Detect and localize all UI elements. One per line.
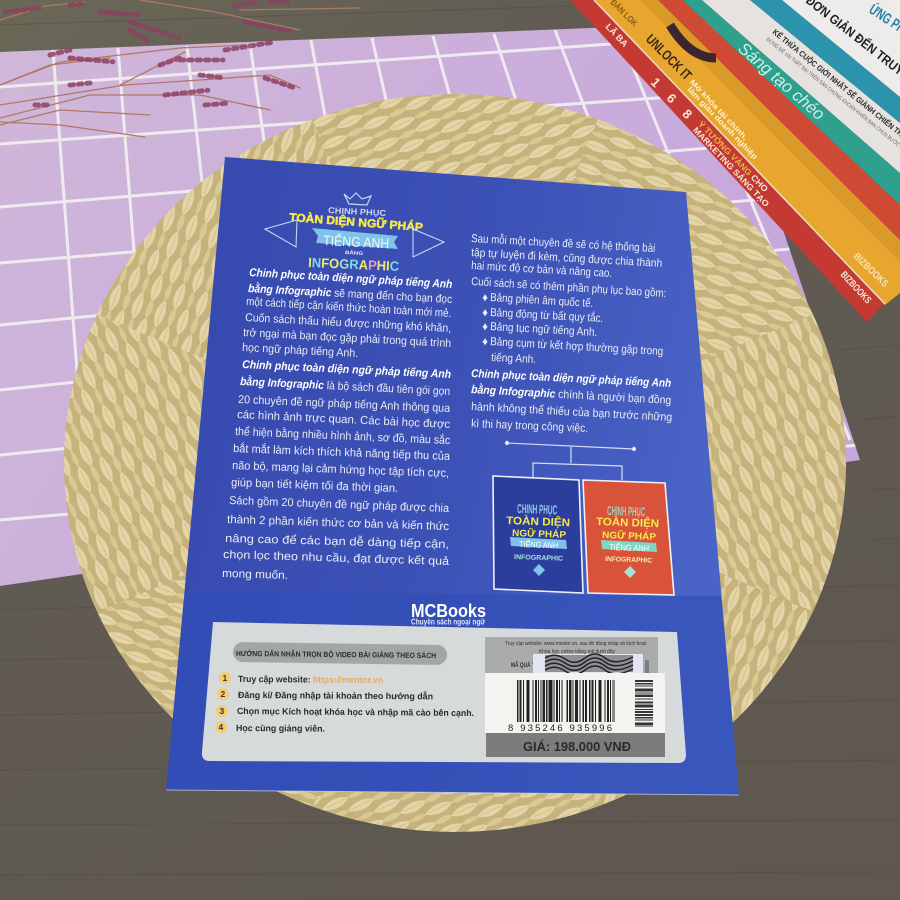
left text column: thành 2 phần kiến thức cơ bản và kiến thức — [227, 514, 450, 533]
left text column: mong muốn. — [222, 568, 288, 582]
right text column: tiếng Anh. — [491, 352, 536, 366]
tree connector diagram — [505, 441, 636, 480]
title: bang: BẰNG — [345, 248, 363, 257]
book thumbnail: blue: TOÀN DIỆN — [506, 514, 570, 529]
book thumbnail: red: CHINH PHỤC — [607, 503, 646, 519]
barcode area — [485, 673, 665, 734]
right text column: kì thi hay trong công việc. — [471, 418, 588, 435]
step 3: 3 — [220, 706, 224, 716]
right text column: ♦ — [482, 292, 488, 304]
left text column: thể hiện bằng nhiều hình ảnh, sơ đồ, màu sắc — [235, 425, 451, 447]
book thumbnail: red: INFOGRAPHIC — [605, 556, 652, 565]
left text column: một cách tiếp cận kiến thức hoàn toàn mới mẻ. — [246, 296, 452, 320]
right text column: Bảng động từ bất quy tắc. — [490, 306, 604, 325]
activation code box: Khóa học online bằng mã dưới đây — [539, 648, 615, 655]
grey information panel — [202, 622, 686, 763]
spine: orange book text: UNLOCK IT — [643, 31, 695, 83]
spine: red book text: 1 6 8 — [648, 75, 695, 122]
stack of books at top right — [570, 0, 900, 322]
scratch-off pattern — [545, 654, 633, 674]
left text column: các hình ảnh trực quan. Các bài học được — [237, 409, 451, 431]
left text column: não bộ, mang lại cảm hứng học tập tích cực, — [232, 460, 449, 480]
title: infographic: INFOGRAPHIC — [308, 255, 400, 274]
right text column: ♦ — [482, 307, 488, 319]
video guide heading pill — [233, 642, 447, 665]
left text column: học ngữ pháp tiếng Anh. — [242, 342, 359, 360]
left text column: Cuốn sách thấu hiểu được những khó khăn, — [245, 312, 451, 335]
left text column: chọn lọc theo nhu cầu, đạt được kết quả — [223, 549, 450, 568]
activation code box: Truy cập website: www.mentor.vn, sau đó đăng nhập và kích hoạt — [505, 641, 646, 647]
left text column: giúp bạn tiết kiệm tối đa thời gian. — [231, 477, 398, 495]
right text column: hành không thể thiếu của bạn trước những — [471, 401, 672, 424]
spine: red book text: BIZBOOKS — [838, 270, 873, 306]
left text column — [222, 267, 453, 582]
right text column: ♦ — [482, 321, 488, 333]
spine: red book text — [604, 22, 873, 306]
right text column: Sau mỗi một chuyên đề sẽ có hệ thống bài — [471, 232, 656, 255]
step 4: 4 — [218, 722, 224, 732]
right text column: Cuối sách sẽ có thêm phần phụ lục bao gồm: — [471, 276, 667, 300]
spine: red book text: MARKETING SÁNG TẠO — [691, 125, 772, 209]
step 2: 2 — [220, 689, 226, 699]
publisher logo: MCBooks: MCBooks — [411, 601, 486, 621]
dried pink flowers — [0, 0, 360, 137]
book back cover — [166, 157, 739, 795]
icon: left triangle — [265, 220, 297, 247]
book thumbnail: blue: INFOGRAPHIC — [514, 554, 563, 563]
book thumbnail: red: TOÀN DIỆN — [596, 515, 659, 530]
right text column: Bảng cụm từ kết hợp thường gặp trong — [490, 336, 664, 358]
step 1: Truy cập website: https://mentor.vn — [238, 674, 383, 685]
book thumbnail: blue: CHINH PHỤC — [517, 501, 558, 517]
left text column: Chinh phục toàn diện ngữ pháp tiếng Anh — [249, 267, 453, 291]
right text column: hai mức độ cơ bản và nâng cao. — [471, 260, 612, 280]
left text column: 20 chuyên đề ngữ pháp tiếng Anh thông qua — [238, 394, 451, 415]
left text column: bắt mắt làm kích thích khả năng tiếp thu của — [233, 442, 451, 463]
price bar: GIÁ: 198.000 VNĐ — [523, 739, 631, 754]
spine: orange book text — [609, 0, 890, 290]
left text column: Chinh phục toàn diện ngữ pháp tiếng Anh — [242, 359, 451, 381]
title: toan dien ngu phap: TOÀN DIỆN NGỮ PHÁP — [289, 211, 424, 234]
publisher logo: MCBooks: Chuyên sách ngoại ngữ — [411, 618, 485, 626]
left text column: trở ngại mà bạn đọc gặp phải trong quá trình — [243, 327, 451, 350]
activation code box — [485, 637, 658, 674]
activation code box: MÃ QUÀ T — [511, 662, 535, 669]
book thumbnail: blue — [493, 476, 583, 593]
price bar — [486, 733, 665, 757]
icon: right triangle — [413, 229, 444, 257]
video guide heading pill: HƯỚNG DẪN NHẬN TRỌN BỘ VIDEO BÀI GIẢNG THEO SÁCH — [236, 649, 436, 660]
right text column: Chinh phục toàn diện ngữ pháp tiếng Anh — [471, 368, 671, 390]
guide steps list — [215, 672, 474, 734]
left text column: bằng Infographic là bộ sách đầu tiên gói gọn — [240, 375, 450, 398]
cover title block — [265, 193, 444, 274]
right text column: tập tự luyện đi kèm, cũng được chia thành — [471, 247, 663, 270]
step 1: 1 — [222, 673, 228, 683]
step 3: Chọn mục Kích hoạt khóa học và nhập mã cào bên cạnh. — [237, 706, 474, 718]
right text column: bằng Infographic chính là người bạn đồng — [471, 383, 672, 407]
right text column: Bảng phiên âm quốc tế. — [490, 292, 594, 310]
spine: orange book text: BIZBOOKS — [851, 251, 890, 290]
round woven straw placemat — [60, 90, 850, 840]
left text column: nâng cao để các bạn dễ dàng tiếp cận, — [225, 532, 449, 551]
book thumbnail: blue: NGỮ PHÁP — [512, 528, 567, 541]
right text column: Bảng tục ngữ tiếng Anh. — [490, 321, 598, 339]
step 4 — [215, 721, 325, 734]
book thumbnail: red: TIẾNG ANH — [609, 542, 649, 553]
left text column: Sách gồm 20 chuyên đề ngữ pháp được chia — [229, 495, 450, 515]
left text column: bằng Infographic sẽ mang đến cho bạn đọc — [248, 282, 453, 306]
spine: teal book text: Sáng tạo chéo — [734, 39, 828, 124]
right text column — [471, 232, 672, 435]
spine: orange book text: làm giàu doanh nghiệp — [686, 85, 760, 162]
right text column: ♦ — [482, 336, 488, 348]
step 4: Học cùng giảng viên. — [236, 723, 325, 734]
title: chinh phuc: CHINH PHỤC — [328, 205, 386, 218]
step 2: Đăng kí/ Đăng nhập tài khoản theo hướng dẫn — [238, 690, 433, 701]
book thumbnail: red — [583, 480, 674, 595]
book thumbnail: blue: TIẾNG ANH — [519, 539, 558, 550]
spine: red book text: LÃ BA — [604, 22, 630, 49]
spine: orange book text: Mở khóa tài chính, — [688, 78, 750, 142]
spine: red book text: Ý TƯỞNG VÀNG CHO — [696, 118, 771, 194]
book thumbnail: red: NGỮ PHÁP — [602, 530, 657, 543]
icon: crown — [344, 193, 371, 205]
purple tiled mat — [0, 23, 860, 586]
barcode area: 8 935246 935996 — [508, 723, 612, 734]
ribbon: tieng anh: TIẾNG ANH — [323, 232, 390, 251]
